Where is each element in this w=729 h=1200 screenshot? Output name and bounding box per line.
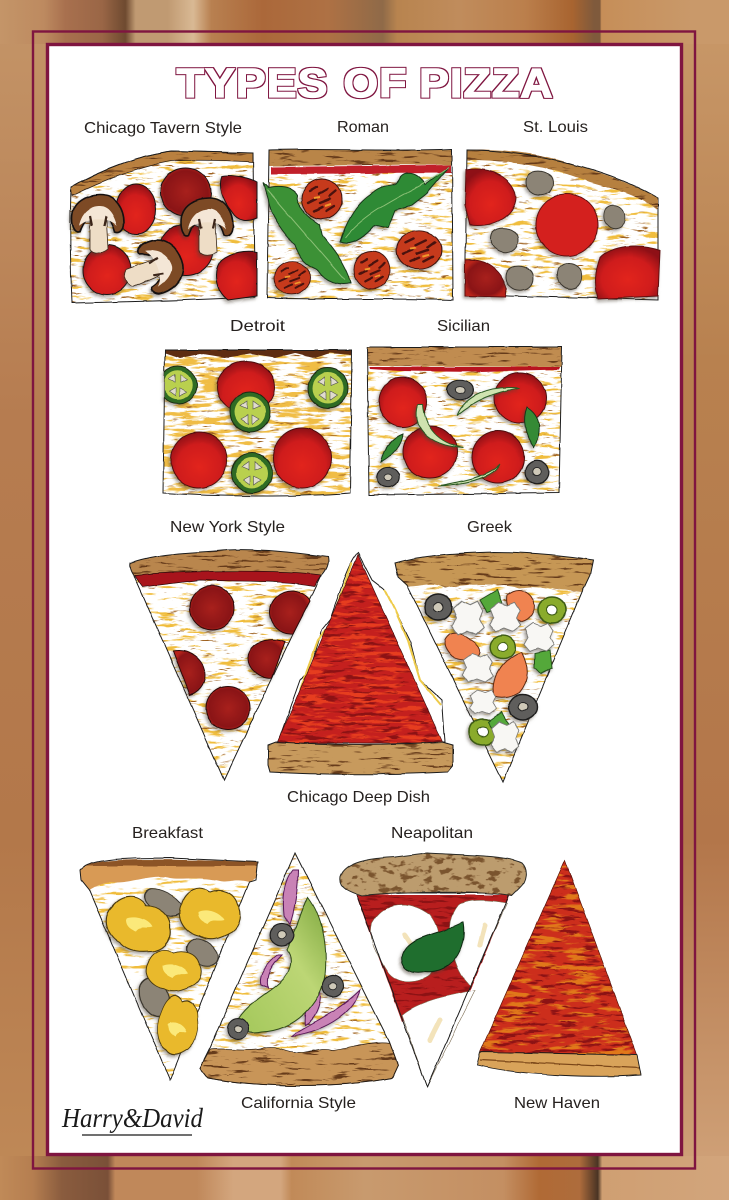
label: St. Louis: St. Louis	[523, 119, 588, 136]
label: California Style: California Style	[241, 1095, 356, 1112]
pizza: California Style	[195, 850, 403, 1088]
pizza: Roman	[262, 145, 458, 304]
label: New Haven: New Haven	[514, 1095, 600, 1112]
logo: Harry & David: Harry&David	[61, 1103, 203, 1133]
pizza: New Haven	[475, 855, 641, 1076]
label: Chicago Tavern Style: Chicago Tavern Style	[84, 120, 242, 137]
label: Chicago Deep Dish: Chicago Deep Dish	[287, 789, 430, 806]
pizza: Detroit	[158, 345, 356, 500]
pizza: New York Style	[125, 545, 335, 785]
pizza: St. Louis	[460, 145, 664, 305]
title: OF	[343, 61, 408, 107]
pizza: Neapolitan	[335, 850, 531, 1087]
title: TYPES	[177, 61, 329, 107]
pizza: Chicago Deep Dish	[264, 550, 458, 778]
label: Detroit: Detroit	[230, 318, 286, 335]
pizza: Breakfast	[75, 858, 263, 1085]
label: New York Style: New York Style	[170, 519, 285, 536]
title: PIZZA	[419, 61, 554, 107]
label: Greek: Greek	[467, 519, 513, 536]
pizza: Sicilian	[362, 342, 567, 500]
pizza: Greek	[390, 548, 598, 785]
label: Neapolitan: Neapolitan	[391, 825, 473, 842]
pizza: Chicago Tavern Style	[65, 145, 260, 310]
label: Roman: Roman	[337, 119, 389, 136]
label: Sicilian: Sicilian	[437, 318, 490, 335]
label: Breakfast: Breakfast	[132, 825, 204, 842]
